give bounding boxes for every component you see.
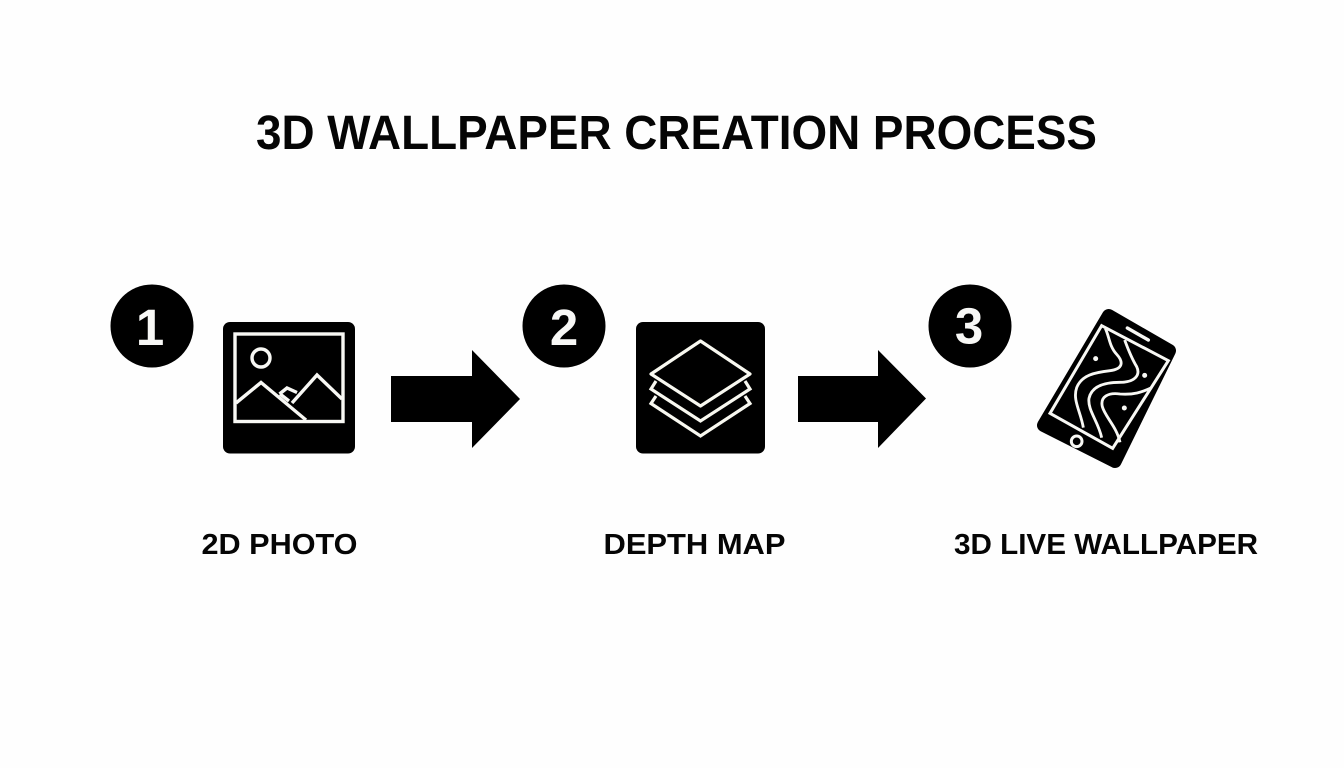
title: 3D WALLPAPER CREATION PROCESS: [256, 107, 1097, 160]
step 3 number badge: 3: [955, 298, 983, 354]
label: depth map: DEPTH MAP: [604, 529, 786, 561]
step 1 number badge: [110, 284, 194, 368]
step 3 number badge: [928, 284, 1012, 368]
label: 2D photo: 2D PHOTO: [202, 529, 358, 561]
icon: phone with 3D live wallpaper: [1044, 316, 1169, 461]
label: 3D live wallpaper: 3D LIVE WALLPAPER: [954, 529, 1258, 561]
step 1 number badge: 1: [136, 299, 164, 356]
arrow: photo to depth map: [391, 350, 520, 448]
step 2 number badge: [522, 284, 606, 368]
step 2 number badge: 2: [550, 299, 578, 356]
icon: depth map layers: [636, 322, 765, 454]
icon: 2D photo: [223, 322, 355, 454]
arrow: depth map to live wallpaper: [798, 350, 926, 448]
